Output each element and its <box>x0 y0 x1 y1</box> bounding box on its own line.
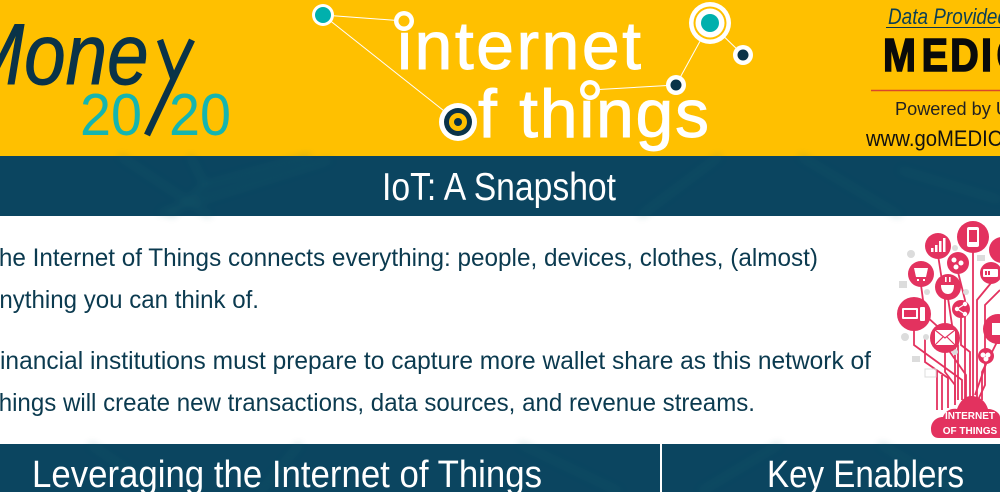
internet of things title: f things <box>478 76 709 152</box>
intro paragraph <box>0 244 818 314</box>
internet of things title: internet <box>397 8 641 84</box>
white icon glyphs <box>902 227 1000 362</box>
tree circuit lines <box>914 250 1000 410</box>
financial institutions paragraph: Financial institutions must prepare to capture more wallet share as this network of <box>0 347 871 375</box>
Money 20/20 logo <box>0 7 231 148</box>
snapshot banner <box>0 156 1000 216</box>
financial institutions paragraph: things will create new transactions, data sources, and revenue streams. <box>0 389 755 417</box>
Money 20/20 logo: 20 <box>80 82 142 148</box>
internet of things title <box>312 2 753 152</box>
cloud with label <box>931 396 1000 438</box>
financial institutions paragraph <box>0 347 871 417</box>
banner heading: IoT: A Snapshot <box>382 166 616 209</box>
faint background icons <box>899 245 985 377</box>
lower section banner <box>0 444 1000 492</box>
header band <box>0 0 1000 156</box>
cloud with label: OF THINGS <box>943 426 998 437</box>
icon circles <box>897 221 1000 364</box>
cloud with label: INTERNET <box>945 411 995 422</box>
data provider credit <box>865 4 1000 151</box>
intro paragraph: The Internet of Things connects everything: people, devices, clothes, (almost) <box>0 244 818 272</box>
icon: internet of things tree <box>897 221 1000 438</box>
Money 20/20 logo: 20 <box>169 82 231 148</box>
